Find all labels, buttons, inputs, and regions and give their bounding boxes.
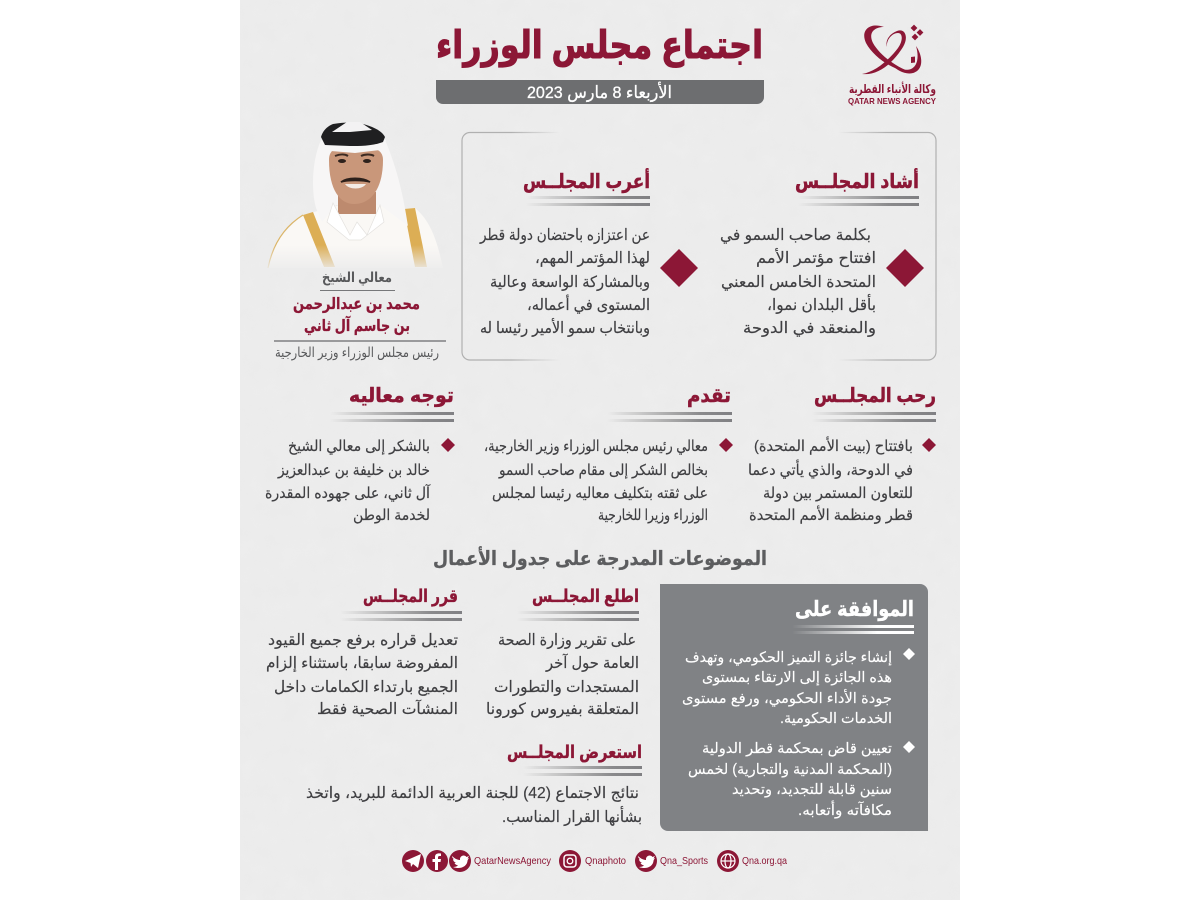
icon: twitter sports xyxy=(635,850,657,872)
person caption: محمد بن عبدالرحمن xyxy=(293,296,420,313)
logo: Qatar News Agency: QATAR NEWS AGENCY xyxy=(848,96,936,106)
section: decided: تعديل قراره برفع جميع القيود xyxy=(268,632,458,650)
handle: QatarNewsAgency: QatarNewsAgency xyxy=(474,855,552,867)
panel: approval: هذه الجائزة إلى الارتقاء بمستوى xyxy=(702,670,892,686)
section: reviewed results xyxy=(306,742,642,827)
section: expressed: وبانتخاب سمو الأمير رئيسا له xyxy=(480,318,650,338)
panel: praise and expression frame xyxy=(462,132,936,360)
icon: twitter xyxy=(449,850,471,872)
person caption: بن جاسم آل ثاني xyxy=(304,315,410,336)
section: his excellency addressed: لخدمة الوطن xyxy=(353,507,430,524)
section: praised: أشاد المجلــس xyxy=(795,167,919,193)
panel: approval: الخدمات الحكومية. xyxy=(780,711,892,727)
panel: approval: إنشاء جائزة التميز الحكومي، وتهدف xyxy=(685,650,892,666)
section: welcomed: قطر ومنظمة الأمم المتحدة xyxy=(749,505,913,524)
section: praised xyxy=(720,167,919,338)
person caption: معالي الشيخ xyxy=(322,269,392,286)
section: decided xyxy=(266,586,462,718)
icon: telegram xyxy=(402,850,424,872)
section: reviewed report: المستجدات والتطورات xyxy=(494,679,639,697)
section: presented: الوزراء وزيرا للخارجية xyxy=(598,507,708,524)
section: expressed: وبالمشاركة الواسعة وعالية xyxy=(490,274,650,292)
icon: facebook xyxy=(426,850,448,872)
section: presented: على ثقته بتكليف معاليه رئيسا لمجلس xyxy=(492,485,708,502)
section: presented: بخالص الشكر إلى مقام صاحب السمو xyxy=(498,462,708,479)
footer social links xyxy=(402,850,787,872)
section: expressed xyxy=(479,167,650,338)
section: decided: الجميع بارتداء الكمامات داخل xyxy=(274,679,458,697)
handle: Qna_Sports: Qna_Sports xyxy=(660,855,708,867)
section: expressed: المستوى في أعماله، xyxy=(527,294,650,315)
panel: approval: تعيين قاض بمحكمة قطر الدولية xyxy=(702,741,892,757)
person caption xyxy=(274,269,446,361)
section: reviewed report: العامة حول آخر xyxy=(545,653,639,672)
section: decided: قرر المجلــس xyxy=(363,586,458,607)
section: praised: المتحدة الخامس المعني xyxy=(721,274,876,292)
portrait xyxy=(262,122,450,272)
section: praised: والمنعقد في الدوحة xyxy=(743,320,876,338)
section: reviewed results: بشأنها القرار المناسب. xyxy=(502,806,642,827)
panel: approval: (المحكمة المدنية والتجارية) لخمس xyxy=(688,762,892,778)
section: presented: معالي رئيس مجلس الوزراء وزير الخارجية، xyxy=(484,438,708,456)
panel: approval: الموافقة على xyxy=(795,598,914,621)
handle: Qnaphoto: Qnaphoto xyxy=(585,855,626,867)
panel: approval: جودة الأداء الحكومي، ورفع مستوى xyxy=(682,689,892,707)
logo: Qatar News Agency xyxy=(848,25,936,106)
section: his excellency addressed: خالد بن خليفة بن عبدالعزيز xyxy=(277,462,430,479)
section: reviewed results: نتائج الاجتماع (42) للجنة العربية الدائمة للبريد، واتخذ xyxy=(306,785,639,803)
date bar: الأربعاء 8 مارس 2023 xyxy=(527,82,672,102)
agenda heading: الموضوعات المدرجة على جدول الأعمال xyxy=(433,545,767,570)
section: praised: بأقل البلدان نموا، xyxy=(767,294,876,314)
date bar xyxy=(436,80,764,104)
section: expressed: لهذا المؤتمر المهم، xyxy=(535,250,650,268)
panel: approval xyxy=(660,584,928,831)
section: his excellency addressed: بالشكر إلى معالي الشيخ xyxy=(288,438,430,456)
panel: approval: مكافآته وأتعابه. xyxy=(798,800,892,819)
icon: diamond xyxy=(660,249,698,287)
section: his excellency addressed: توجه معاليه xyxy=(349,385,454,407)
section: decided: المفروضة سابقا، باستثناء إلزام xyxy=(266,655,458,673)
background paper panel xyxy=(240,0,960,900)
section: his excellency addressed xyxy=(265,385,455,524)
section: expressed: أعرب المجلــس xyxy=(523,167,650,193)
section: welcomed: بافتتاح (بيت الأمم المتحدة) xyxy=(754,436,913,455)
icon: diamond xyxy=(886,249,924,287)
section: welcomed: في الدوحة، والذي يأتي دعما xyxy=(748,459,913,480)
person caption: رئيس مجلس الوزراء وزير الخارجية xyxy=(275,345,439,361)
section: reviewed report: المتعلقة بفيروس كورونا xyxy=(486,701,639,719)
icon: instagram xyxy=(559,850,581,872)
title: اجتماع مجلس الوزراء xyxy=(436,25,763,67)
logo: Qatar News Agency: وكالة الأنباء القطرية xyxy=(849,81,936,97)
handle: Qna.org.qa: Qna.org.qa xyxy=(742,855,787,867)
section: presented: تقدم xyxy=(687,385,731,407)
section: welcomed: للتعاون المستمر بين دولة xyxy=(763,485,913,502)
section: decided: المنشآت الصحية فقط xyxy=(317,699,458,718)
section: praised: بكلمة صاحب السمو في xyxy=(720,227,871,245)
section: expressed: عن اعتزازه باحتضان دولة قطر xyxy=(479,227,650,245)
section: welcomed: رحب المجلــس xyxy=(814,385,936,407)
section: presented xyxy=(484,385,733,524)
section: reviewed report: اطلع المجلــس xyxy=(532,586,639,607)
icon: globe xyxy=(717,850,739,872)
section: reviewed results: استعرض المجلــس xyxy=(507,742,642,763)
panel: approval: سنين قابلة للتجديد، وتحديد xyxy=(732,782,892,798)
section: praised: افتتاح مؤتمر الأمم xyxy=(756,248,876,268)
section: reviewed report xyxy=(486,586,639,719)
section: his excellency addressed: آل ثاني، على جهوده المقدرة xyxy=(265,484,431,503)
section: welcomed xyxy=(748,385,936,524)
section: reviewed report: على تقرير وزارة الصحة xyxy=(498,632,636,650)
